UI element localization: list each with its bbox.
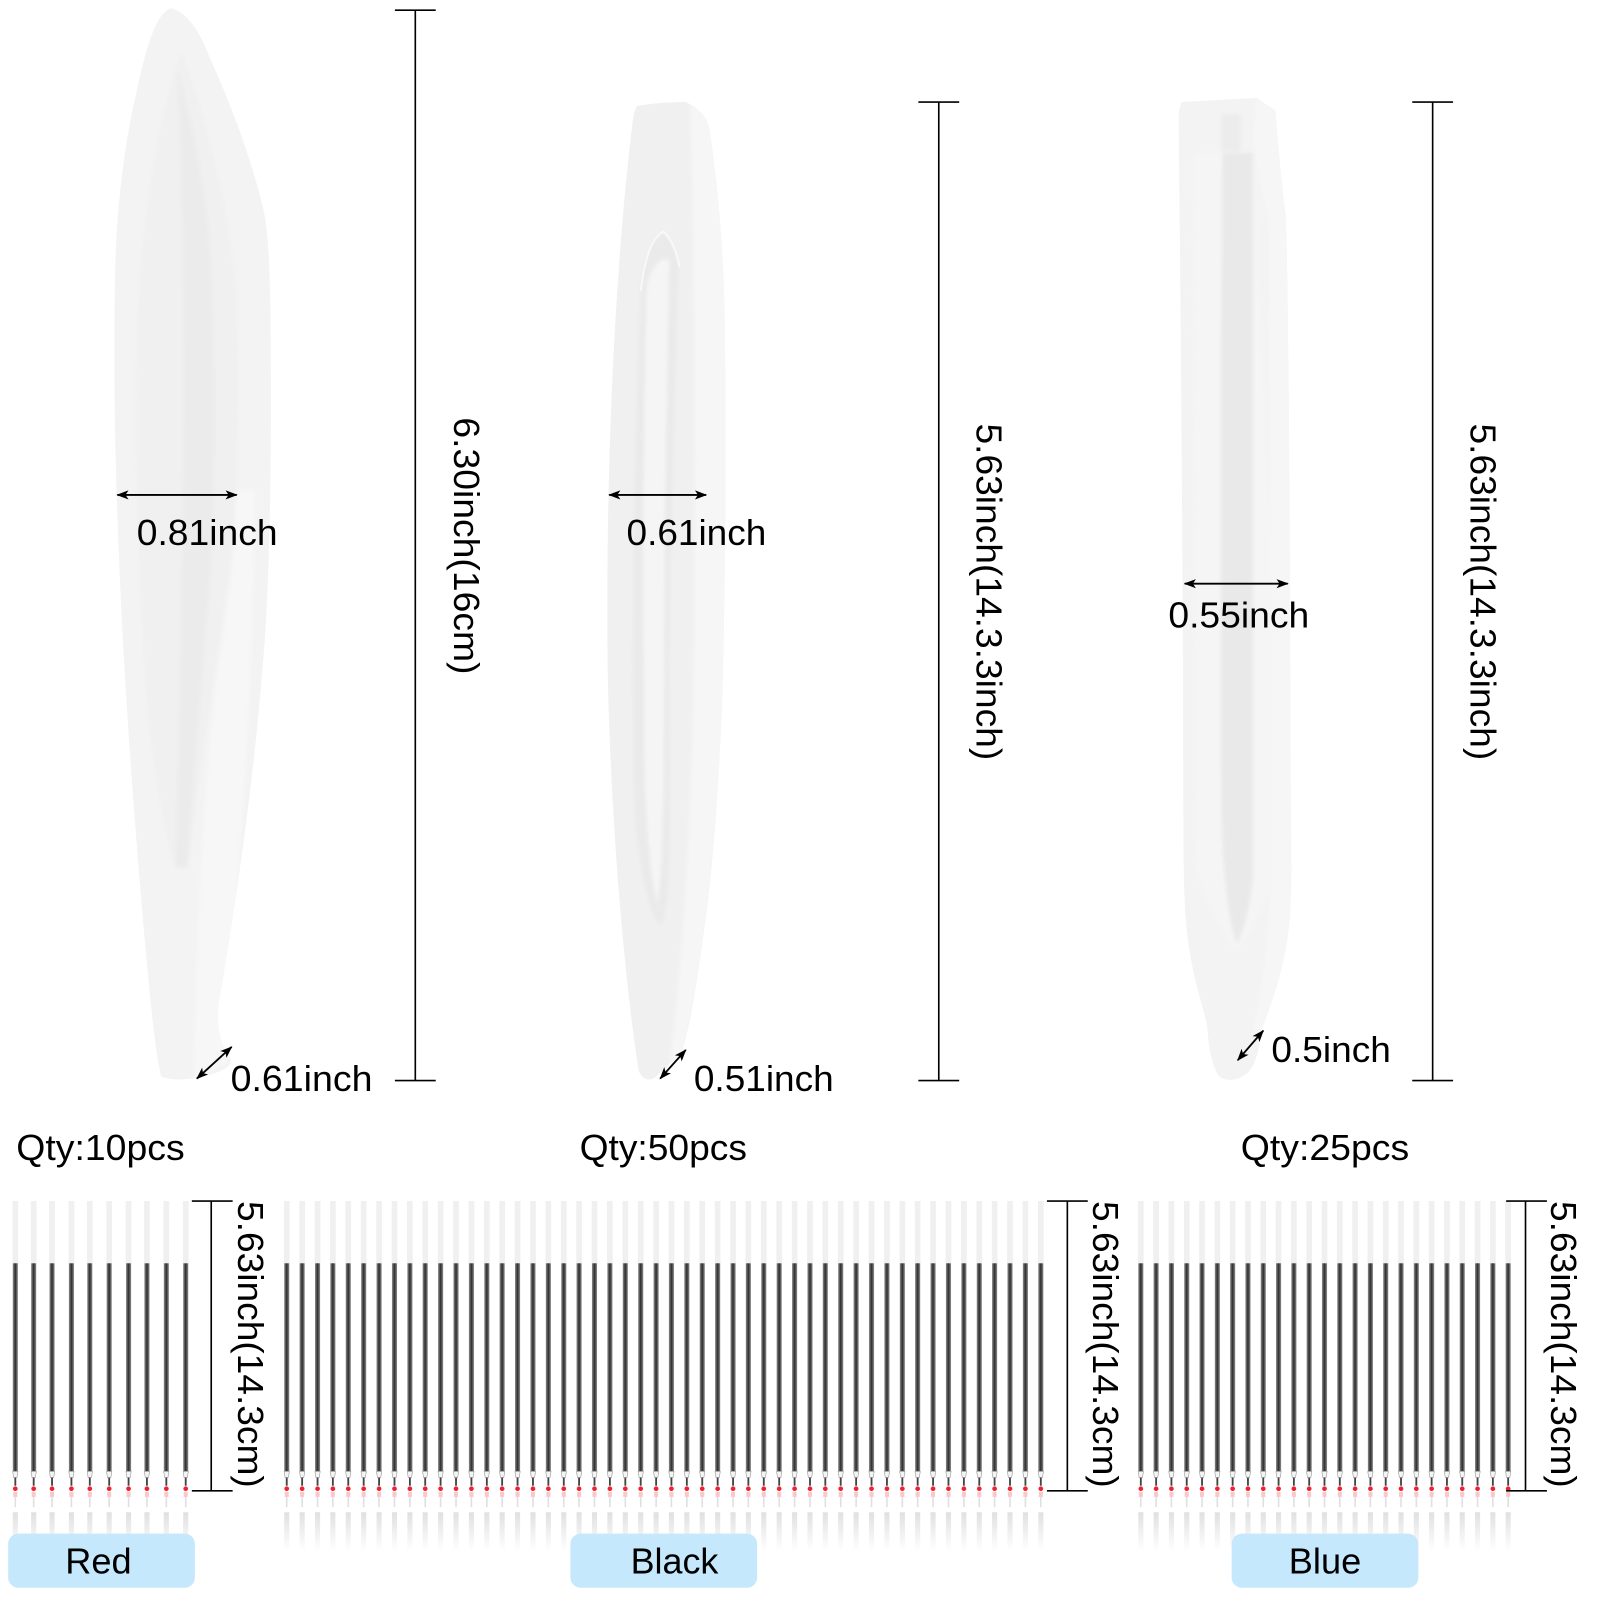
height label: mold 3: 5.63inch(14.3.3inch) (1462, 423, 1502, 760)
colour tag: red (8, 1534, 195, 1588)
tip label: mold 3: 0.5inch (1271, 1030, 1391, 1070)
colour tag: blue (1232, 1534, 1418, 1588)
width label: mold 2: 0.61inch (627, 513, 766, 553)
tip arrow: mold 2 (660, 1050, 686, 1079)
tip arrow: mold 1 (197, 1047, 232, 1079)
refill length label: red: 5.63inch(14.3cm) (230, 1201, 270, 1488)
width label: mold 1: 0.81inch (137, 513, 278, 553)
mold 3: square-notch silicone mold (1173, 92, 1296, 1087)
width arrow: mold 3 (1185, 583, 1288, 585)
refills: red group of 10 (12, 1201, 189, 1551)
height dimension line: mold 2 (918, 102, 959, 1081)
height dimension line: mold 1 (395, 10, 436, 1081)
refill length label: blue: 5.63inch(14.3cm) (1543, 1201, 1583, 1488)
height label: mold 2: 5.63inch(14.3.3inch) (969, 423, 1009, 760)
height label: mold 1: 6.30inch(16cm) (446, 417, 486, 674)
refill length label: black: 5.63inch(14.3cm) (1085, 1201, 1125, 1488)
width arrow: mold 1 (117, 494, 237, 496)
quantity: blue: Qty:25pcs (1241, 1128, 1409, 1168)
colour tag: black (570, 1534, 757, 1588)
refill length line: blue (1506, 1201, 1547, 1491)
tip arrow: mold 3 (1238, 1031, 1263, 1060)
tip label: mold 1: 0.61inch (231, 1059, 372, 1099)
refills: blue group of 25 (1138, 1201, 1511, 1551)
width arrow: mold 2 (609, 494, 706, 496)
colour tag: blue: Blue (1289, 1541, 1361, 1581)
height dimension line: mold 3 (1412, 102, 1453, 1081)
mold 1: pointed leaf-shaped silicone mold (114, 8, 271, 1080)
quantity: black: Qty:50pcs (580, 1128, 747, 1168)
quantity: red: Qty:10pcs (16, 1128, 185, 1168)
refills: black group of 50 (284, 1201, 1044, 1551)
colour tag: black: Black (631, 1541, 719, 1581)
refill length line: black (1047, 1201, 1088, 1491)
width label: mold 3: 0.55inch (1168, 596, 1309, 636)
tip label: mold 2: 0.51inch (694, 1059, 834, 1099)
mold 2: flat-top silicone mold (602, 97, 730, 1087)
colour tag: red: Red (65, 1541, 132, 1581)
refill length line: red (192, 1201, 233, 1491)
